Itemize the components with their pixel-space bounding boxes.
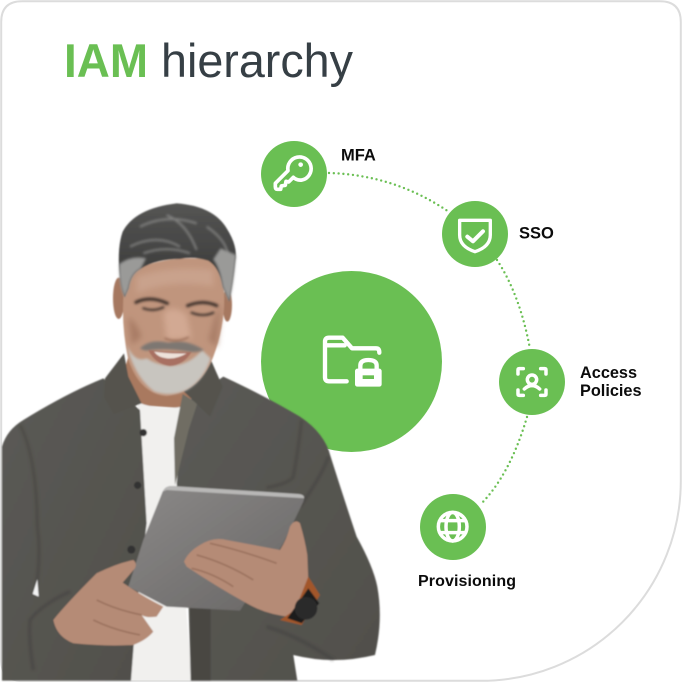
icon: shield	[460, 220, 490, 252]
central circle with folder lock icon	[261, 271, 442, 452]
label: MFA: MFA	[341, 146, 376, 164]
hand on right of tablet	[184, 521, 308, 617]
smile	[148, 350, 192, 366]
node: Access Policies	[499, 349, 642, 415]
icon: key	[275, 157, 311, 189]
small gap beside arm	[33, 579, 39, 597]
node: SSO	[442, 201, 554, 267]
hair highlights	[130, 215, 228, 257]
icon: globe	[438, 512, 467, 541]
title	[64, 34, 353, 87]
facial shading	[128, 268, 222, 347]
shirt shading	[20, 420, 333, 670]
title: hierarchy	[161, 34, 353, 87]
icon: face scan	[518, 369, 546, 395]
ears	[113, 278, 232, 322]
dotted connector arcs	[329, 173, 530, 505]
label: Access Policies: Access	[580, 364, 637, 382]
eyes and brows	[136, 299, 217, 341]
hair	[119, 203, 236, 302]
watch	[280, 577, 320, 625]
node: MFA	[261, 141, 376, 207]
title: IAM	[64, 34, 148, 87]
moustache	[140, 341, 204, 352]
label: SSO: SSO	[519, 224, 554, 242]
node: Provisioning	[418, 494, 516, 590]
neck	[124, 347, 211, 408]
face	[123, 258, 224, 396]
collar	[104, 353, 223, 417]
tablet	[128, 486, 304, 611]
buttons	[127, 429, 147, 554]
grey temples	[119, 248, 236, 302]
button placket	[174, 394, 197, 485]
white undershirt	[131, 402, 192, 680]
icon: folder with lock	[325, 338, 381, 386]
hand on left of tablet	[53, 560, 163, 646]
label: Provisioning: Provisioning	[418, 573, 516, 590]
photo: man using a tablet	[2, 203, 380, 681]
beard	[127, 344, 211, 394]
label: Access Policies: Policies	[580, 382, 642, 400]
shirt	[2, 377, 380, 681]
